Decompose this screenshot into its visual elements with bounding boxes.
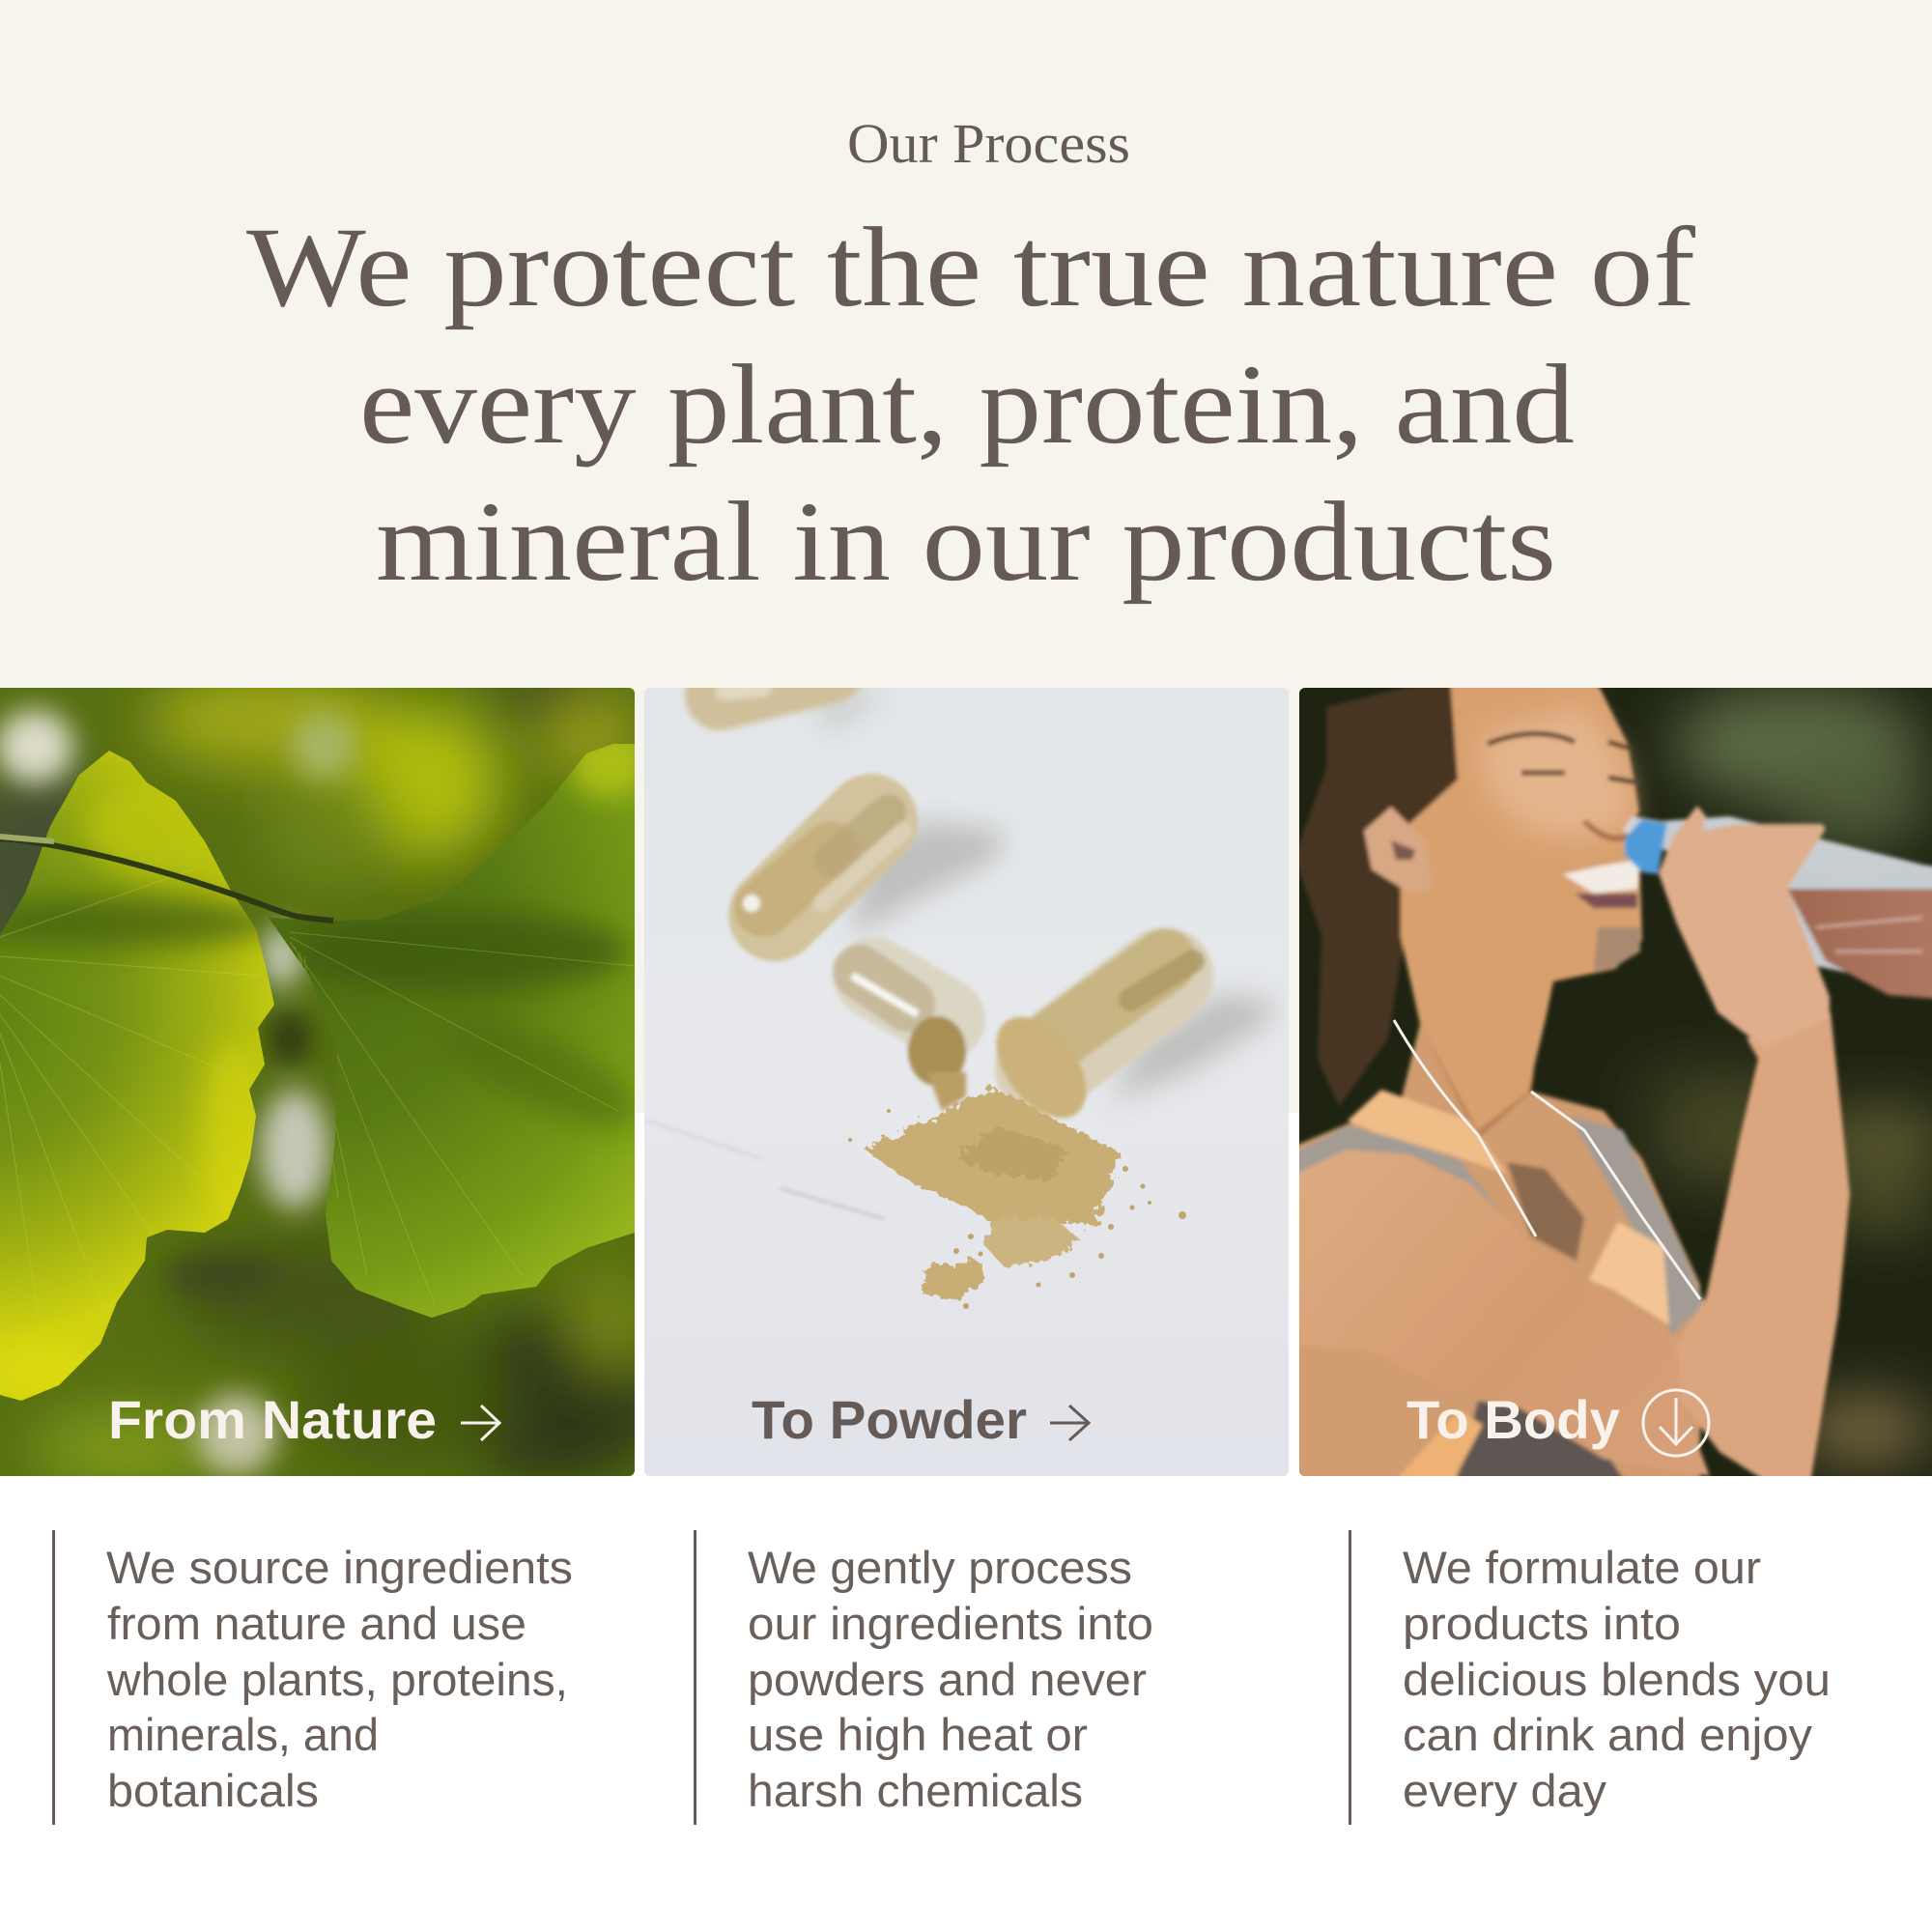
- brows and eyes: [1488, 733, 1637, 782]
- earphone cable: [1394, 1020, 1700, 1299]
- text block: To Powder description: [694, 1530, 1153, 1825]
- top capsule: [720, 668, 831, 696]
- chest shadow: [1507, 1162, 1584, 1261]
- text block: To Powder description: powders and never: [748, 1654, 1147, 1705]
- left leaf: [0, 744, 280, 1410]
- title: We protect the true nature of: [246, 204, 1696, 330]
- icon: circled down arrow: [1643, 1390, 1709, 1456]
- title: mineral in our products: [376, 478, 1556, 605]
- ear: [1364, 807, 1432, 894]
- icon: arrow right: [1050, 1406, 1089, 1440]
- right leaf: [261, 728, 652, 1323]
- clothing: [1348, 1090, 1507, 1174]
- text block: To Powder description: harsh chemicals: [748, 1765, 1083, 1816]
- panel: From Nature: [0, 669, 667, 1488]
- mouth: [1563, 860, 1640, 894]
- capsule shadows: [811, 688, 1275, 1101]
- powder pile: [865, 1087, 1121, 1300]
- label: From Nature: From Nature: [108, 1389, 437, 1450]
- text block: To Body description: can drink and enjoy: [1403, 1709, 1813, 1760]
- capsule full: [743, 811, 903, 915]
- forearm: [1677, 1012, 1850, 1507]
- text block: From Nature description: [52, 1530, 573, 1825]
- face: [1401, 676, 1642, 1130]
- panel: To Body: [1275, 676, 1932, 1507]
- panel: To Powder: [644, 668, 1289, 1476]
- text block: To Powder description: use high heat or: [748, 1709, 1088, 1760]
- stem: [0, 838, 333, 921]
- text block: From Nature description: whole plants, proteins,: [106, 1654, 568, 1705]
- text block: To Powder description: our ingredients into: [748, 1598, 1153, 1649]
- text block: From Nature description: minerals, and: [107, 1709, 379, 1760]
- label: To Powder: To Powder: [752, 1389, 1027, 1450]
- photo: capsules and powder: [644, 668, 1289, 1476]
- photo: ginkgo leaves: [0, 669, 667, 1488]
- hand: [1659, 806, 1830, 1048]
- capsule opened: [979, 961, 1193, 1134]
- text block: To Body description: products into: [1403, 1598, 1681, 1649]
- bottle cap: [1625, 819, 1667, 874]
- nose: [1584, 821, 1637, 838]
- text block: From Nature description: botanicals: [107, 1765, 319, 1816]
- torso and neck: [1299, 1022, 1704, 1476]
- text block: To Body description: every day: [1403, 1765, 1607, 1816]
- eyebrow: Our Process: Our Process: [847, 112, 1130, 175]
- upper arm: [1275, 1150, 1710, 1476]
- photo: woman drinking water: [1275, 676, 1932, 1507]
- powder specks: [848, 1109, 1186, 1309]
- title: [246, 204, 1696, 605]
- label: To Body: To Body: [1406, 1389, 1620, 1450]
- text block: From Nature description: We source ingredients: [106, 1542, 573, 1593]
- text block: To Body description: We formulate our: [1403, 1542, 1761, 1593]
- capsule transparent: [852, 972, 966, 1111]
- text block: To Powder description: We gently process: [748, 1542, 1132, 1593]
- icon: arrow right: [461, 1406, 499, 1440]
- text block: From Nature description: from nature and use: [107, 1598, 526, 1649]
- title: every plant, protein, and: [359, 341, 1575, 468]
- hair: [1299, 688, 1461, 1105]
- text block: To Body description: [1349, 1530, 1831, 1825]
- bottle: [1623, 816, 1932, 995]
- text block: To Body description: delicious blends you: [1403, 1654, 1831, 1705]
